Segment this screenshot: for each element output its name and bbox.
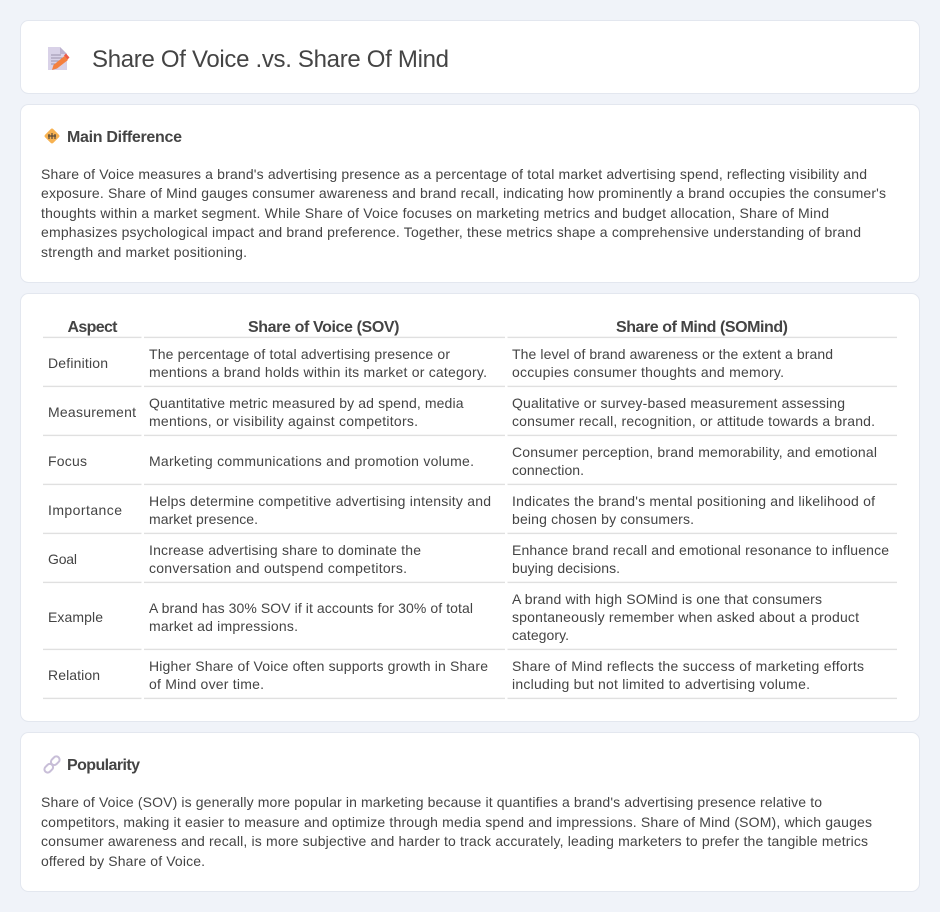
icon: diamond sign: [44, 128, 60, 144]
row: goal: buying decisions.: [512, 560, 620, 576]
row: definition: Definition: [48, 355, 108, 371]
panel: popularity: [20, 732, 920, 892]
row: goal: conversation and outspend competitors.: [149, 560, 407, 576]
row: measurement: Quantitative metric measured by ad spend, media: [149, 395, 464, 411]
row: measurement: Measurement: [48, 404, 136, 420]
row: example: spontaneously remember when asked about a product: [512, 609, 859, 625]
row: example: A brand has 30% SOV if it accounts for 30% of total: [149, 600, 473, 616]
row: goal: Goal: [48, 551, 77, 567]
row: goal: Enhance brand recall and emotional resonance to influence: [512, 542, 889, 558]
table header: Share of Voice (SOV): [248, 319, 400, 336]
text block: main difference: emphasizes psychological impact and brand preference. Together, these metrics shape a comprehensive understanding of brand: [41, 224, 861, 240]
row: focus: connection.: [512, 462, 584, 478]
row: definition: [43, 346, 897, 387]
text block: popularity: [41, 794, 872, 869]
row: focus: Consumer perception, brand memorability, and emotional: [512, 444, 877, 460]
row: definition: occupies consumer thoughts and memory.: [512, 364, 784, 380]
row: focus: Focus: [48, 453, 87, 469]
row: example: A brand with high SOMind is one that consumers: [512, 591, 822, 607]
row: importance: Importance: [48, 502, 122, 518]
title: Share Of Voice .vs. Share Of Mind: [92, 46, 449, 73]
row: importance: market presence.: [149, 511, 258, 527]
icon: chain link: [43, 755, 61, 774]
row: relation: Relation: [48, 667, 100, 683]
row: definition: The level of brand awareness or the extent a brand: [512, 346, 833, 362]
row: measurement: Qualitative or survey-based measurement assessing: [512, 395, 845, 411]
row: definition: The percentage of total advertising presence or: [149, 346, 450, 362]
text block: popularity: Share of Voice (SOV) is generally more popular in marketing because it quantifies a brand's advertising presence relative to: [41, 794, 822, 810]
panel: main difference: [20, 104, 920, 282]
row: importance: Helps determine competitive advertising intensity and: [149, 493, 491, 509]
table header: Aspect: [68, 319, 118, 336]
row: definition: mentions a brand holds within its market or category.: [149, 364, 487, 380]
text block: main difference: Share of Voice measures a brand's advertising presence as a percentage of total market advertising spend, reflecting visibility and: [41, 166, 867, 182]
icon: document with pencil: [48, 47, 70, 70]
text block: main difference: [41, 166, 886, 260]
row: focus: Marketing communications and promotion volume.: [149, 453, 474, 469]
text block: main difference: exposure. Share of Mind gauges consumer awareness and brand recall, indicating how prominently a brand occupies the consumer's: [41, 185, 886, 201]
row: example: market ad impressions.: [149, 618, 298, 634]
panel: comparison table: [20, 294, 920, 722]
text block: main difference: strength and market positioning.: [41, 244, 247, 260]
text block: popularity: competitors, making it easier to measure and optimize through media spend and impressions. Share of Mind (SOM), which gauges: [41, 814, 872, 830]
text block: main difference: thoughts within a market segment. While Share of Voice focuses on marketing metrics and budget allocation, Share of Mind: [41, 205, 829, 221]
row: example: [43, 591, 897, 650]
heading: popularity: Popularity: [67, 757, 140, 774]
row: importance: [43, 493, 897, 534]
panel: header: [20, 20, 920, 94]
row: focus: [43, 444, 897, 485]
row: goal: Increase advertising share to dominate the: [149, 542, 421, 558]
table header: Share of Mind (SOMind): [616, 319, 788, 336]
row: measurement: consumer recall, recognition, or attitude towards a brand.: [512, 413, 875, 429]
text block: popularity: consumer awareness and recall, is more subjective and harder to track accurately, leading marketers to prefer the tangible metrics: [41, 833, 868, 849]
row: relation: [43, 658, 897, 699]
heading: main difference: Main Difference: [67, 129, 182, 146]
row: relation: of Mind over time.: [149, 676, 264, 692]
row: measurement: [43, 395, 897, 436]
row: example: Example: [48, 609, 103, 625]
row: importance: being chosen by consumers.: [512, 511, 694, 527]
row: relation: Higher Share of Voice often supports growth in Share: [149, 658, 488, 674]
text block: popularity: offered by Share of Voice.: [41, 853, 205, 869]
row: measurement: mentions, or visibility against competitors.: [149, 413, 418, 429]
row: importance: Indicates the brand's mental positioning and likelihood of: [512, 493, 875, 509]
row: example: category.: [512, 627, 569, 643]
table header: [43, 319, 897, 338]
row: relation: including but not limited to advertising volume.: [512, 676, 810, 692]
row: goal: [43, 542, 897, 583]
row: relation: Share of Mind reflects the success of marketing efforts: [512, 658, 864, 674]
